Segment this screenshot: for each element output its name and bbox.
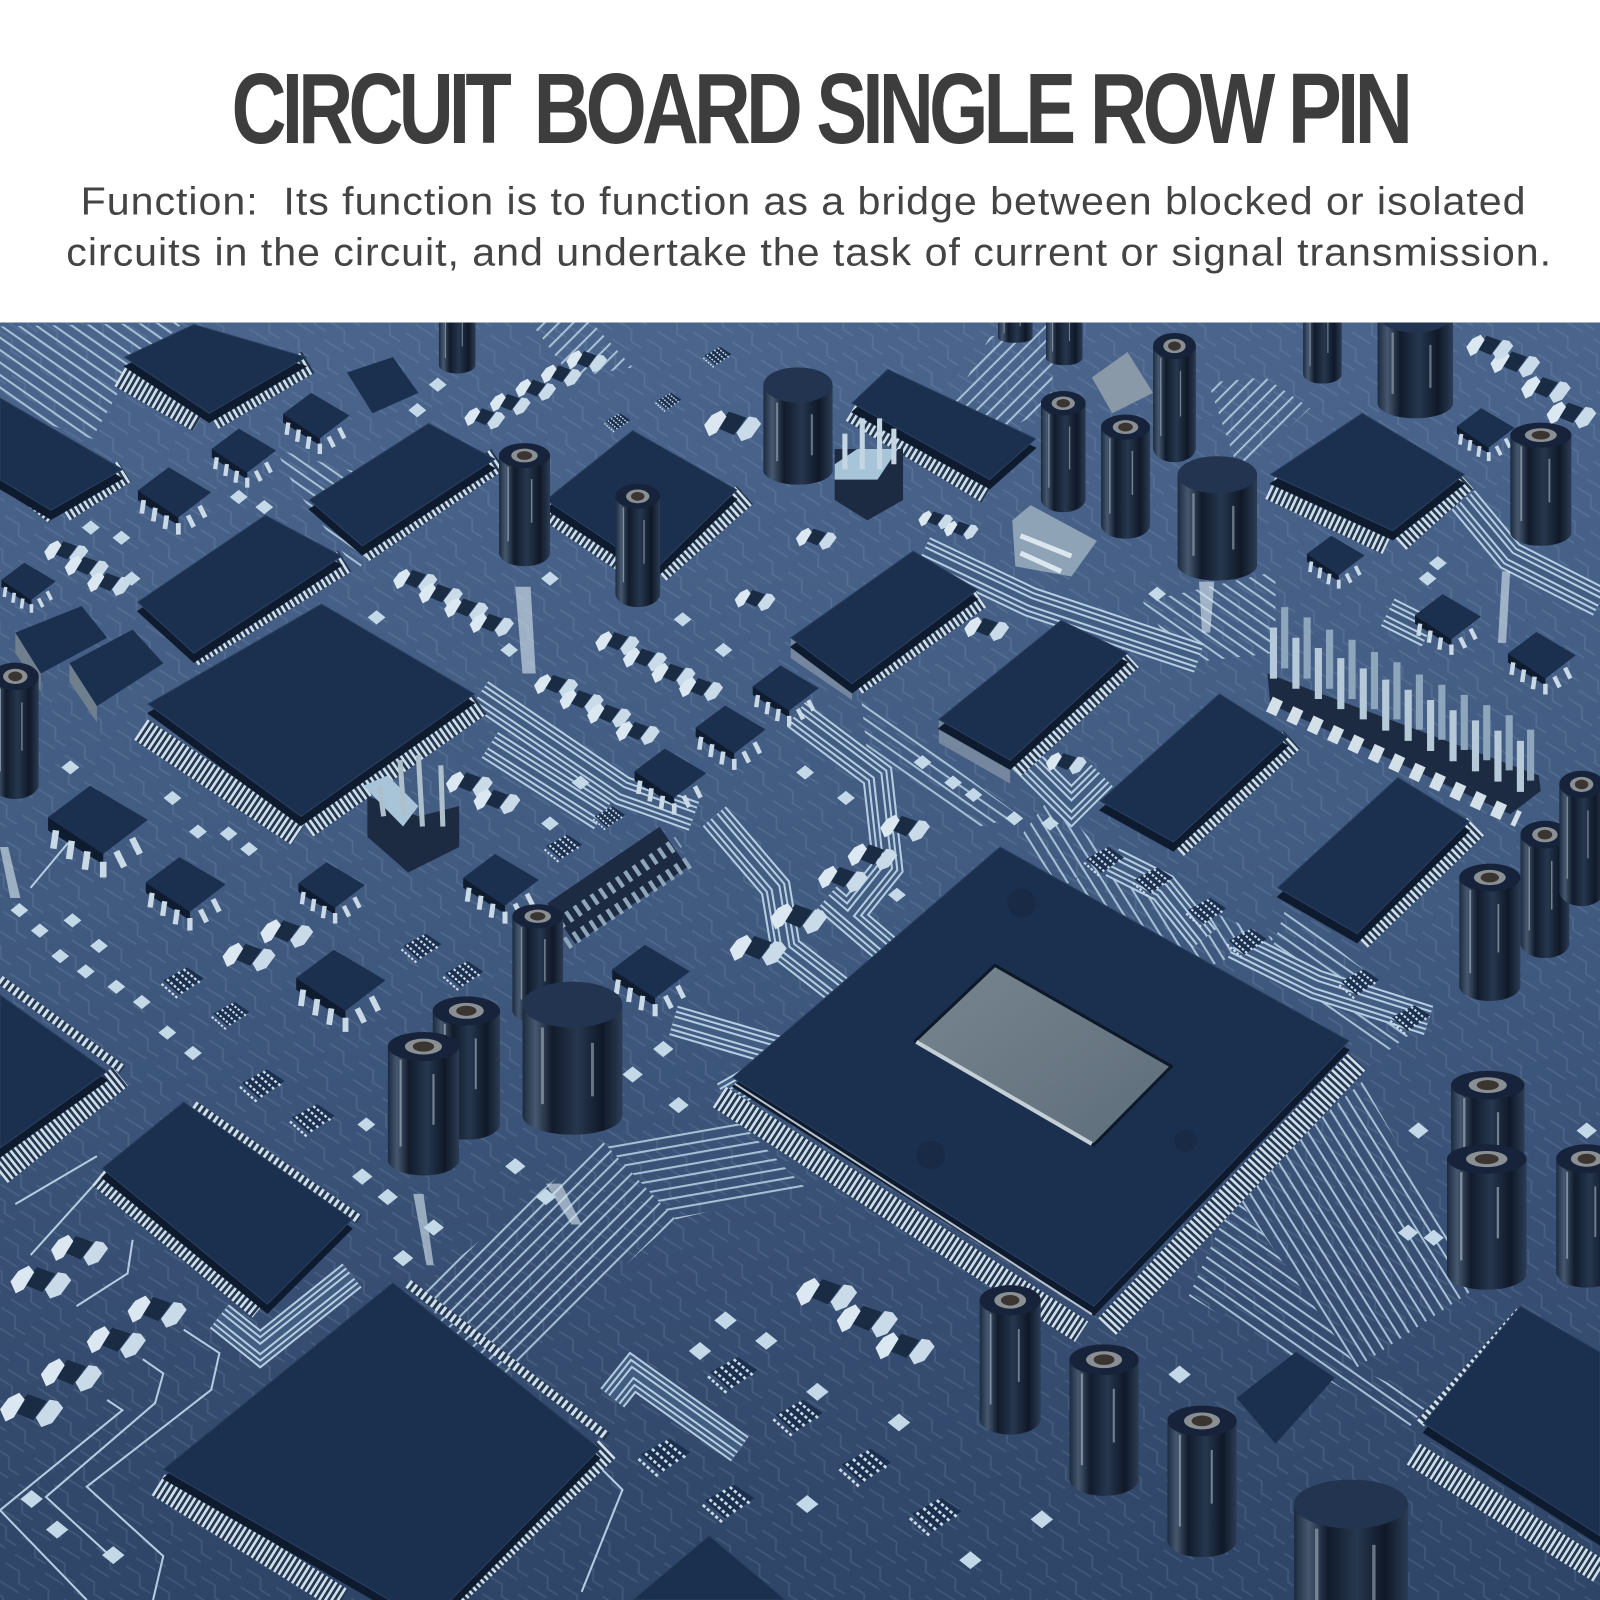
bottom edge chip xyxy=(633,1536,786,1600)
title: CIRCUIT xyxy=(232,53,512,165)
main processor chip xyxy=(733,847,1349,1314)
surface mount blocks xyxy=(15,357,418,722)
title xyxy=(232,53,1408,165)
bottom right chip xyxy=(1423,1306,1600,1536)
small white post connectors xyxy=(363,352,1153,872)
page background xyxy=(0,0,1600,322)
board reflections xyxy=(0,571,1510,1265)
tiny soic parts xyxy=(162,347,1430,1536)
heat spreader xyxy=(915,965,1171,1145)
board surface xyxy=(0,322,1600,1600)
title: PIN xyxy=(1288,53,1408,165)
lower left chip xyxy=(102,1102,352,1304)
solder pads xyxy=(10,378,1597,1569)
title: SINGLE xyxy=(816,53,1073,165)
small double row connector xyxy=(559,842,689,944)
left edge chip xyxy=(0,995,107,1148)
chip pin rows xyxy=(0,362,1600,1600)
middle left chip xyxy=(148,604,474,816)
small integrated circuits xyxy=(1,393,1576,1444)
title: ROW xyxy=(1090,53,1276,165)
thin routed traces xyxy=(0,834,624,1600)
bottom left processor chip xyxy=(163,1283,600,1600)
function description xyxy=(66,179,1552,274)
function description: Function: Its function is to function as a bridge between blocked or isolated xyxy=(81,179,1527,223)
title: BOARD xyxy=(534,53,800,165)
chip resistors and capacitors xyxy=(0,335,1596,1427)
pin header row xyxy=(1267,607,1541,819)
bus traces xyxy=(219,500,1600,1449)
fine trace texture xyxy=(0,322,1600,1600)
central diagonal chips xyxy=(791,551,1469,934)
copper trace fields xyxy=(0,322,1480,1429)
function description: circuits in the circuit, and undertake the task of current or signal transmission. xyxy=(66,230,1552,274)
upper row chips xyxy=(0,324,1464,653)
